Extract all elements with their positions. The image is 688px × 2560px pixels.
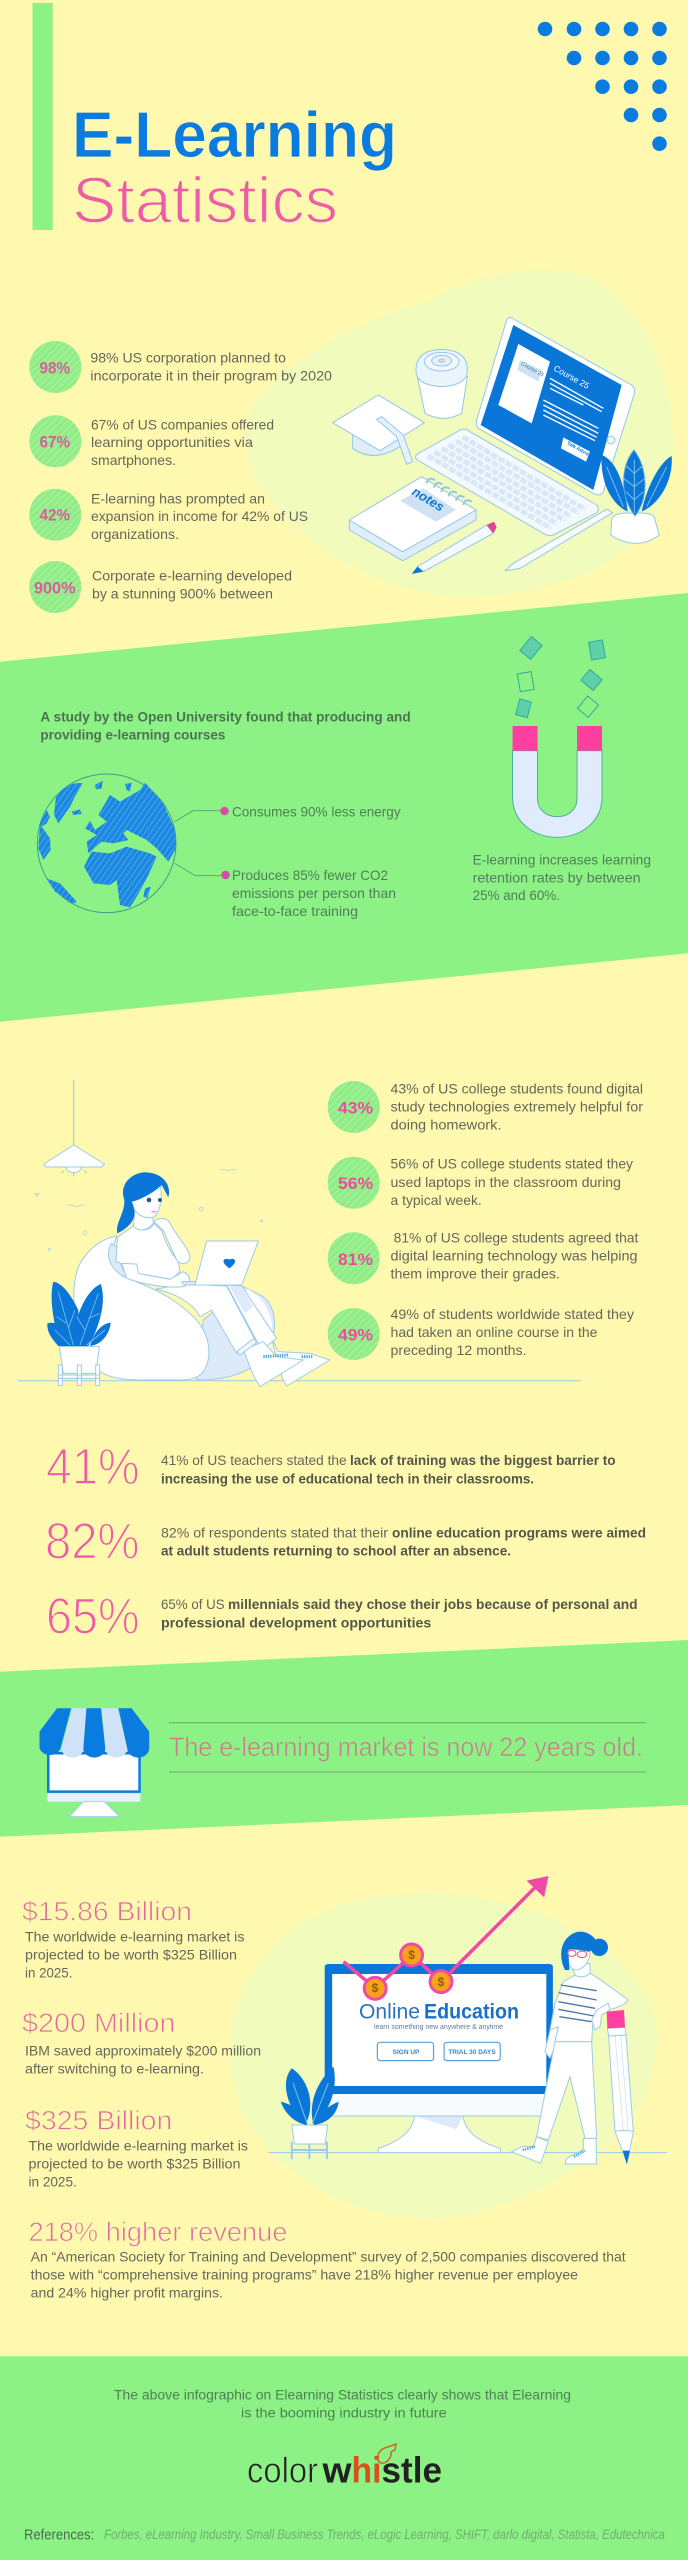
- stat 900: by a stunning 900% between: [92, 585, 273, 601]
- icon: globe: [37, 774, 176, 913]
- stat: 325 billion: in 2025.: [28, 2174, 77, 2190]
- laptop illustration: [333, 318, 672, 574]
- magnet caption: [473, 851, 651, 903]
- stat: 218 percent revenue: 218% higher revenue: [28, 2217, 287, 2247]
- title: E-Learning: [72, 98, 397, 171]
- accent bar: [32, 3, 53, 230]
- big stat 41: 41% of US teachers stated the: [161, 1452, 347, 1468]
- illustration: student on beanbag: [35, 1169, 330, 1387]
- magnet caption: 25% and 60%.: [473, 887, 560, 903]
- stat 900: Corporate e-learning developed: [92, 567, 292, 583]
- icon: potted plant: [601, 450, 672, 543]
- stat 42: expansion in income for 42% of US: [91, 508, 308, 524]
- stat 43: 43% of US college students found digital: [390, 1080, 643, 1096]
- stat: 200 million: after switching to e-learning.: [25, 2061, 204, 2077]
- trial button: [444, 2042, 500, 2061]
- monitor body: [325, 1964, 553, 2116]
- stat: 325 billion: projected to be worth $325 Billion: [28, 2155, 241, 2171]
- callout: emissions: [221, 867, 396, 919]
- footer text: [114, 2386, 571, 2420]
- illustration: figure with pencil: [512, 1932, 633, 2164]
- footer text: The above infographic on Elearning Statistics clearly shows that Elearning: [114, 2386, 571, 2402]
- stat 67: 67% of US companies offered: [91, 416, 274, 432]
- study heading: A study by the Open University found that producing and: [40, 709, 411, 725]
- colorwhistle logo: color: [247, 2450, 318, 2491]
- big stat 41: [46, 1438, 616, 1495]
- stat: 218 percent revenue: An “American Society for Training and Development” survey of 2,500 companies discovered that: [31, 2248, 626, 2264]
- tablet label text: Course 25: [520, 361, 545, 379]
- stat 49: 49% of students worldwide stated they: [390, 1306, 634, 1322]
- stat 42: 42%: [40, 506, 70, 525]
- stat 81: them improve their grades.: [390, 1265, 560, 1281]
- stat: 325 billion: $325 Billion: [25, 2105, 172, 2135]
- connector lines: [175, 811, 222, 876]
- icon: magnet: [513, 726, 602, 837]
- icon: tablet with course: [476, 318, 635, 495]
- student figure: [116, 1172, 330, 1387]
- market heading: The e-learning market is now 22 years old.: [169, 1732, 643, 1762]
- study heading: providing e-learning courses: [40, 727, 226, 743]
- callout: emissions: Produces 85% fewer CO2: [232, 867, 388, 883]
- callout: emissions: face-to-face training: [232, 903, 358, 919]
- light blob behind laptop: [245, 270, 673, 597]
- stat 67: 67%: [40, 433, 70, 452]
- button labels: SIGN UP: [393, 2049, 420, 2056]
- button labels: TRIAL 30 DAYS: [448, 2049, 496, 2056]
- icon: storefront monitor: [39, 1708, 149, 1817]
- stat 98: incorporate it in their program by 2020: [90, 368, 332, 384]
- big stat 41: 41%: [46, 1438, 140, 1495]
- stat 42: organizations.: [91, 526, 179, 542]
- floor line: [269, 2152, 667, 2154]
- stat 900: [29, 561, 292, 613]
- stat 56: 56%: [338, 1174, 373, 1193]
- stat 49: preceding 12 months.: [390, 1342, 526, 1358]
- stat 42: [29, 489, 308, 542]
- stat: 200 million: IBM saved approximately $200 million: [25, 2042, 261, 2058]
- big stat 65: professional development opportunities: [161, 1614, 432, 1630]
- icon: stylus: [505, 509, 613, 571]
- stat: 15.86 billion: in 2025.: [25, 1965, 72, 1981]
- icon: notebook: [349, 477, 476, 561]
- monitor heading: Online: [359, 2000, 420, 2023]
- stat 81: digital learning technology was helping: [390, 1247, 638, 1263]
- stat 900: 900%: [34, 578, 76, 597]
- coin labels: $: [372, 1981, 379, 1995]
- stat: 218 percent revenue: those with “comprehensive training programs” have 218% higher revenue per employee: [31, 2266, 578, 2282]
- big stat 65: millennials said they chose their jobs because of personal and: [228, 1596, 638, 1612]
- floor line: [18, 1380, 581, 1382]
- stat: 15.86 billion: [22, 1897, 244, 1981]
- icon: hanging lamp: [44, 1080, 104, 1177]
- big stat 82: 82%: [45, 1512, 140, 1569]
- stat: 218 percent revenue: [28, 2217, 626, 2300]
- stat 56: a typical week.: [390, 1192, 482, 1208]
- magnet caption: E-learning increases learning: [473, 851, 651, 867]
- colorwhistle logo: [247, 2444, 442, 2491]
- stat 81: [328, 1229, 639, 1284]
- stat 98: [29, 341, 332, 393]
- stat 98: 98%: [40, 358, 70, 377]
- monitor heading: Education: [424, 2000, 519, 2023]
- stat 98: 98% US corporation planned to: [90, 350, 286, 366]
- monitor stand: [378, 2116, 500, 2153]
- big stat 82: 82% of respondents stated that their: [161, 1524, 388, 1540]
- stat 81: 81% of US college students agreed that: [394, 1229, 639, 1245]
- title: [72, 98, 397, 237]
- references: References:: [24, 2526, 94, 2543]
- laptop: [182, 1241, 258, 1285]
- icon: coffee cup: [416, 349, 467, 418]
- illustration: online education monitor: [269, 1876, 667, 2159]
- stat 43: study technologies extremely helpful for: [390, 1099, 643, 1115]
- stat: 15.86 billion: $15.86 Billion: [22, 1897, 192, 1927]
- stat 43: [328, 1080, 643, 1133]
- callout: energy: Consumes 90% less energy: [232, 804, 401, 820]
- big stat 41: lack of training was the biggest barrier to: [350, 1452, 616, 1468]
- monitor heading: [359, 2000, 519, 2023]
- stat 67: smartphones.: [91, 452, 176, 468]
- stat: 200 million: [22, 2008, 261, 2077]
- stat circles group one: [29, 341, 332, 613]
- stat 56: [328, 1156, 633, 1209]
- icon: pencil: [412, 522, 497, 574]
- stat: 325 billion: The worldwide e-learning market is: [28, 2138, 248, 2154]
- light blob behind online education: [230, 1893, 658, 2218]
- panel: green market band: [0, 1640, 688, 1837]
- coin labels: $: [438, 1975, 445, 1989]
- stat 81: 81%: [338, 1250, 373, 1269]
- stat 43: doing homework.: [390, 1117, 502, 1133]
- colorwhistle logo: w: [321, 2450, 353, 2491]
- figure: [512, 1932, 628, 2164]
- colorwhistle logo: stle: [382, 2450, 442, 2491]
- stat 67: learning opportunities via: [91, 434, 253, 450]
- trend arrow with coins: [344, 1876, 548, 1999]
- pencil: [607, 2010, 633, 2164]
- icon: keyboard: [416, 429, 598, 536]
- icon: plant: [281, 2067, 339, 2159]
- market heading: [169, 1723, 646, 1772]
- panel: green study band: [0, 593, 688, 1022]
- stat 49: 49%: [338, 1326, 373, 1345]
- stat 49: [328, 1306, 634, 1360]
- footer text: is the booming industry in future: [241, 2404, 447, 2420]
- stat: 325 billion: [25, 2105, 248, 2190]
- icon: flying books: [516, 637, 605, 718]
- big stat 82: [45, 1512, 646, 1569]
- tablet button text: Talk Advisor: [566, 441, 594, 460]
- beanbag: [74, 1236, 275, 1380]
- icon: graduation cap: [333, 395, 424, 464]
- stat 56: 56% of US college students stated they: [390, 1156, 633, 1172]
- magnet caption: retention rates by between: [473, 869, 641, 885]
- panel: footer band: [0, 2356, 688, 2560]
- stat: 15.86 billion: The worldwide e-learning market is: [25, 1929, 244, 1945]
- stat 49: had taken an online course in the: [390, 1324, 598, 1340]
- stat: 218 percent revenue: and 24% higher profit margins.: [31, 2284, 223, 2300]
- big stat 65: 65% of US: [161, 1596, 225, 1612]
- stat 67: [29, 415, 274, 468]
- sign up button: [377, 2042, 434, 2061]
- coin labels: [372, 1948, 445, 1995]
- big stat 65: [46, 1587, 638, 1644]
- big stat 82: online education programs were aimed: [392, 1524, 646, 1540]
- study heading: [40, 709, 411, 743]
- callout: emissions: emissions per person than: [232, 885, 396, 901]
- title: Statistics: [72, 164, 338, 237]
- big stat 65: 65%: [46, 1587, 140, 1644]
- stat: 15.86 billion: projected to be worth $325 Billion: [25, 1947, 237, 1963]
- button labels: [393, 2049, 496, 2056]
- stat 43: 43%: [338, 1098, 373, 1117]
- tablet course title: Course 25: [552, 363, 591, 391]
- monitor subheading: learn something new anywhere & anytime: [374, 2024, 503, 2031]
- icon: potted plant: [47, 1282, 111, 1386]
- stat: 200 million: $200 Million: [22, 2008, 176, 2038]
- dot pattern: [538, 22, 667, 151]
- decorative marks: [35, 1169, 263, 1250]
- colorwhistle logo: hi: [352, 2450, 382, 2491]
- big stat 41: increasing the use of educational tech in their classrooms.: [161, 1470, 534, 1486]
- notes label: notes: [409, 484, 447, 514]
- big stat 82: at adult students returning to school after an absence.: [161, 1542, 511, 1558]
- stat 56: used laptops in the classroom during: [390, 1174, 621, 1190]
- coin labels: $: [408, 1948, 415, 1962]
- stat 42: E-learning has prompted an: [91, 490, 265, 506]
